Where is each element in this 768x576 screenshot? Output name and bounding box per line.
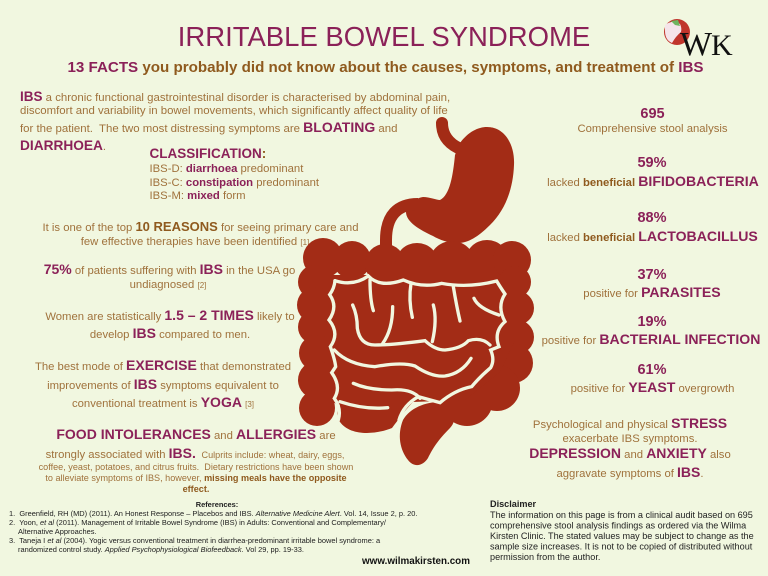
fact: food intolerances: to alleviate symptoms of IBS, however, missing meals have the opposite	[45, 473, 347, 483]
classification: IBS-C: constipation predominant	[150, 177, 320, 189]
intro text block	[20, 89, 450, 153]
fact: undiagnosed: 75% of patients suffering with IBS in the USA go	[44, 261, 295, 277]
title: IRRITABLE BOWEL SYNDROME	[178, 21, 590, 52]
references: 3. Taneja I et al (2004). Yogic versus conventional treatment in diarrhea-predominant irritable bowel syndrome: a	[9, 536, 381, 545]
duodenum	[386, 204, 418, 250]
fact: undiagnosed: undiagnosed [2]	[130, 279, 206, 291]
fact: women: Women are statistically 1.5 – 2 TIMES likely to	[45, 307, 295, 323]
references: randomized control study. Applied Psychophysiological Biofeedback. Vol 29, pp. 19-33.	[18, 545, 304, 554]
stat: parasites	[583, 267, 721, 300]
fact: exercise: The best mode of EXERCISE that demonstrated	[35, 357, 291, 373]
fact: women	[45, 307, 295, 341]
stat: lactobacillus: 88%	[637, 210, 667, 226]
subtitle: 13 FACTS you probably did not know about the causes, symptoms, and treatment of IBS	[67, 59, 704, 76]
stat: bifidobacteria	[547, 155, 759, 189]
classification: IBS-M: mixed form	[150, 190, 246, 202]
disclaimer: permission from the author.	[490, 552, 600, 562]
fact: food intolerances: effect.	[183, 484, 209, 494]
logo: K	[711, 29, 733, 62]
disclaimer	[490, 499, 754, 562]
classification	[150, 146, 320, 202]
fact: exercise: improvements of IBS symptoms equivalent to	[47, 376, 279, 392]
stat: parasites: 37%	[637, 267, 667, 283]
disclaimer: sample size increases. It is not to be copied of distributed without	[490, 542, 753, 552]
classification: CLASSIFICATION:	[150, 146, 266, 161]
stat: bacterial infection: 19%	[637, 314, 667, 330]
logo	[664, 19, 733, 63]
small intestine	[325, 275, 515, 433]
digestive system illustration	[297, 123, 534, 465]
stat: 695 analyses: Comprehensive stool analysis	[577, 123, 728, 135]
stat: bacterial infection	[542, 314, 760, 347]
stat: yeast: positive for YEAST overgrowth	[571, 379, 734, 395]
fact: food intolerances	[39, 426, 353, 494]
stress and depression note: exacerbate IBS symptoms.	[562, 433, 698, 445]
fact: women: develop IBS compared to men.	[90, 325, 250, 341]
intro text block: DIARRHOEA.	[20, 138, 106, 153]
fact: exercise	[35, 357, 291, 410]
fact: exercise: conventional treatment is YOGA [3]	[72, 394, 254, 410]
disclaimer: Disclaimer	[490, 499, 537, 509]
disclaimer: comprehensive stool analysis findings as ordered via the Wilma	[490, 520, 747, 530]
references	[9, 500, 417, 554]
stat: yeast	[571, 362, 734, 395]
disclaimer: Kirsten Clinic. The stated values may be subject to change as the	[490, 531, 754, 541]
fact: undiagnosed	[44, 261, 295, 291]
disclaimer: The information on this page is from a clinical audit based on 695	[490, 510, 753, 520]
fact: food intolerances: FOOD INTOLERANCES and ALLERGIES are	[56, 426, 336, 442]
logo: W	[680, 26, 713, 63]
stress and depression note	[529, 415, 731, 480]
intro text block: discomfort and variability in bowel movements, which significantly affect quality of life	[20, 105, 448, 117]
references: Alternative Approaches.	[18, 527, 97, 536]
fact: food intolerances: coffee, yeast, potatoes, and citrus fruits. Dietary restrictions have been shown	[39, 462, 353, 472]
fact: top 10 reasons: It is one of the top 10 REASONS for seeing primary care and	[43, 219, 358, 234]
stat: 695 analyses: 695	[640, 106, 665, 122]
fact: food intolerances: strongly associated with IBS. Culprits include: wheat, dairy, eggs,	[46, 445, 344, 461]
stress and depression note: Psychological and physical STRESS	[533, 415, 727, 431]
stress and depression note: DEPRESSION and ANXIETY also	[529, 445, 731, 461]
fact: top 10 reasons: few effective therapies have been identified [1]	[81, 236, 309, 248]
stomach	[406, 127, 514, 243]
sigmoid colon and rectum	[400, 402, 454, 465]
oesophagus	[442, 123, 463, 150]
intro text block: for the patient. The two most distressing symptoms are BLOATING and	[20, 119, 397, 135]
intestine folds	[329, 276, 505, 420]
website: www.wilmakirsten.com	[361, 556, 470, 567]
stat: yeast: 61%	[637, 362, 667, 378]
stat: bifidobacteria: lacked beneficial BIFIDOBACTERIA	[547, 173, 759, 189]
stat: 695 analyses	[577, 106, 728, 135]
stat: parasites: positive for PARASITES	[583, 284, 721, 300]
stat: lactobacillus: lacked beneficial LACTOBACILLUS	[547, 228, 758, 244]
references: 1. Greenfield, RH (MD) (2011). An Honest Response – Placebos and IBS. Alternative Medicine Alert. Vol. 14, Issue 2, p. 20.	[9, 509, 417, 518]
fact: top 10 reasons	[43, 219, 358, 248]
colon	[297, 238, 534, 426]
stat: bacterial infection: positive for BACTERIAL INFECTION	[542, 331, 760, 347]
intro text block: IBS a chronic functional gastrointestinal disorder is characterised by abdominal pain,	[20, 89, 450, 104]
stat: lactobacillus	[547, 210, 758, 244]
stat: bifidobacteria: 59%	[637, 155, 667, 171]
references: References:	[196, 500, 238, 509]
classification: IBS-D: diarrhoea predominant	[150, 163, 304, 175]
references: 2. Yoon, et al (2011). Management of Irritable Bowel Syndrome (IBS) in Adults: Conventional and Complementary/	[9, 518, 387, 527]
stress and depression note: aggravate symptoms of IBS.	[556, 464, 704, 480]
